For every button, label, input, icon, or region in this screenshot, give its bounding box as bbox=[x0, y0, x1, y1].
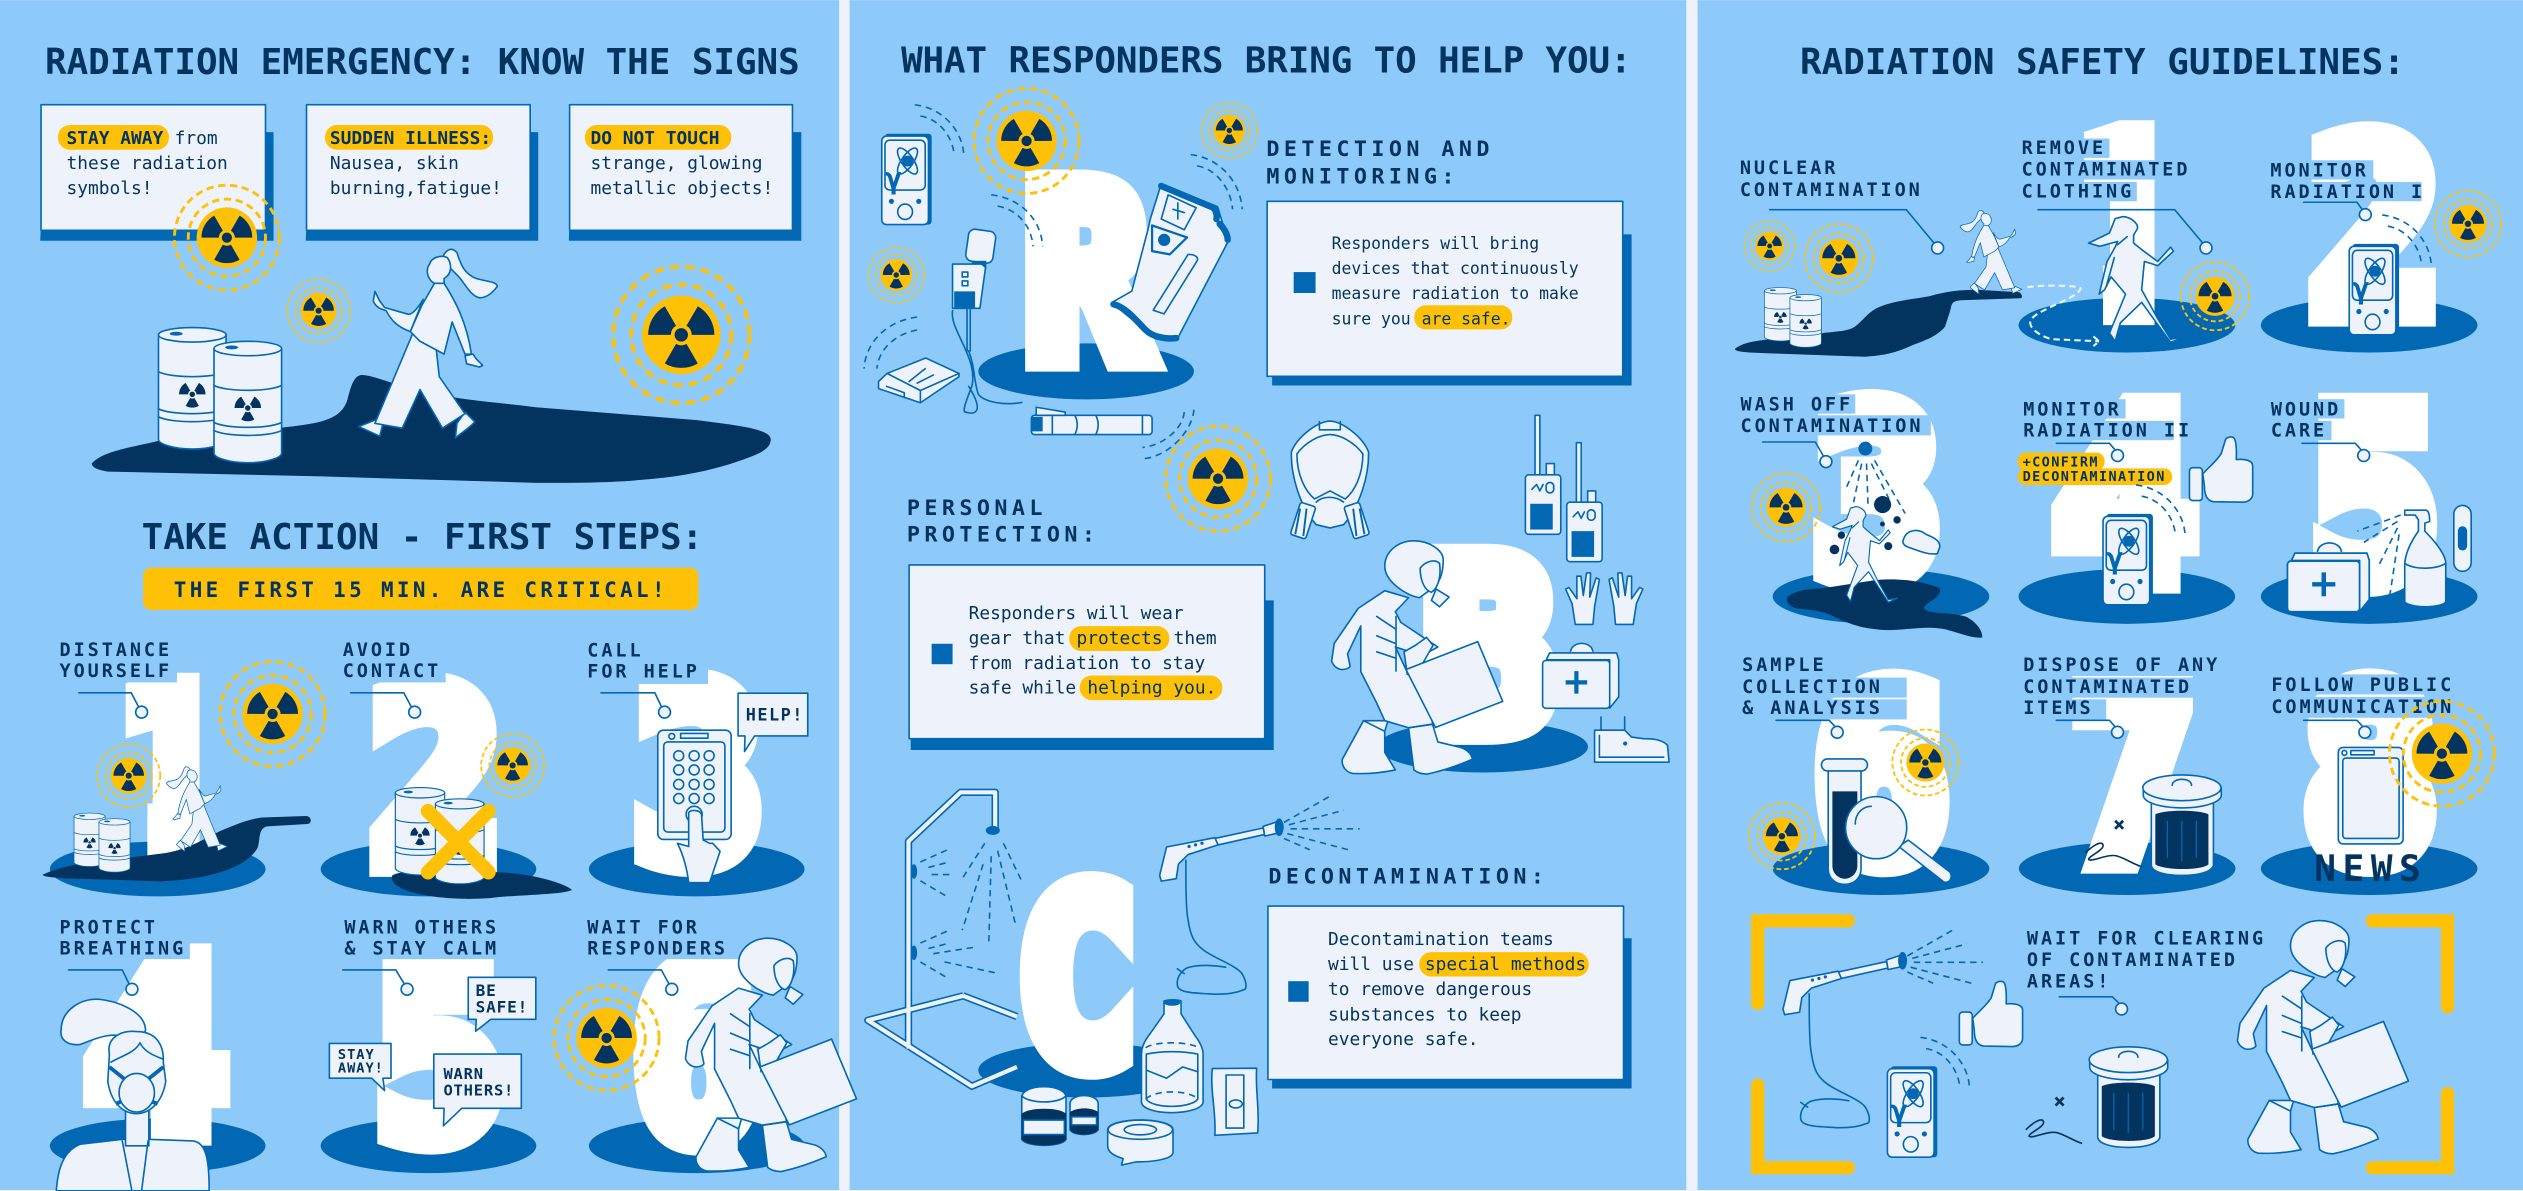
sign card: stay away: STAY AWAY bbox=[66, 128, 163, 149]
text card: personal protection: Responders will wear bbox=[969, 603, 1184, 624]
step 2: avoid contact: AVOID bbox=[343, 640, 413, 661]
sign card: stay away bbox=[40, 105, 274, 241]
text card: personal protection: helping you. bbox=[1087, 678, 1216, 699]
guideline 7: dispose of contaminated items: CONTAMINATED bbox=[2023, 677, 2192, 698]
guideline 1: remove contaminated clothing: CLOTHING bbox=[2022, 181, 2134, 202]
guideline 8: follow public communication bbox=[2261, 640, 2494, 916]
panel: take action, first steps bbox=[43, 517, 857, 1191]
text card: detection bbox=[1267, 201, 1632, 386]
guideline 3: wash off contamination: WASH OFF bbox=[1741, 394, 1853, 415]
section A illustration: detection and monitoring: R bbox=[1024, 136, 1149, 414]
guideline 7: dispose of contaminated items: 7 bbox=[2071, 639, 2196, 916]
section C illustration: decontamination: C bbox=[1017, 841, 1136, 1119]
heading: decontamination: DECONTAMINATION: bbox=[1268, 865, 1548, 890]
guideline 1: remove contaminated clothing: CONTAMINATED bbox=[2022, 160, 2190, 181]
step 5: warn others and stay calm: SAFE! bbox=[476, 998, 528, 1017]
sign card: do not touch: metallic objects! bbox=[591, 178, 773, 199]
guideline 6: sample collection and analysis: SAMPLE bbox=[1742, 655, 1827, 676]
guideline 7: dispose of contaminated items bbox=[2019, 639, 2235, 916]
sign card: do not touch: DO NOT TOUCH bbox=[591, 128, 720, 149]
guideline: nuclear contamination: NUCLEAR bbox=[1740, 158, 1838, 179]
heading: detection and monitoring bbox=[1266, 137, 1494, 190]
heading: personal protection bbox=[907, 496, 1099, 548]
guideline 6: sample collection and analysis: 6 bbox=[1814, 640, 1948, 916]
guideline 6: sample collection and analysis: COLLECTION bbox=[1742, 677, 1883, 698]
guideline 3: wash off contamination bbox=[1738, 360, 1989, 638]
step 1: distance yourself: DISTANCE bbox=[60, 640, 172, 661]
icon: small radiation hazard bbox=[287, 279, 350, 342]
title: what responders bring: WHAT RESPONDERS BRING TO HELP YOU: bbox=[901, 41, 1632, 82]
step 5: warn others and stay calm: STAY bbox=[338, 1047, 375, 1063]
text card: personal protection: gear that bbox=[969, 628, 1065, 649]
sign card: sudden illness bbox=[306, 105, 538, 241]
guideline 6: sample collection and analysis: & ANALYSIS bbox=[1742, 698, 1883, 719]
text card: personal protection: them bbox=[1174, 628, 1217, 649]
step 6: wait for responders: RESPONDERS bbox=[587, 938, 728, 959]
sign card: do not touch bbox=[569, 105, 801, 241]
step 5: warn others and stay calm: WARN bbox=[443, 1065, 484, 1083]
guideline 5: wound care: CARE bbox=[2271, 421, 2327, 442]
guideline 7: dispose of contaminated items: DISPOSE OF ANY bbox=[2023, 655, 2220, 676]
guideline 4: monitor radiation II: DECONTAMINATION bbox=[2023, 469, 2166, 485]
text card: decontamination: substances to keep bbox=[1328, 1004, 1522, 1025]
step 5: warn others and stay calm: WARN OTHERS bbox=[344, 917, 499, 938]
text card: detection: devices that continuously bbox=[1332, 259, 1579, 278]
step 1: distance yourself: YOURSELF bbox=[60, 661, 172, 682]
guideline 3: wash off contamination: 3 bbox=[1813, 360, 1941, 632]
step 1: distance yourself bbox=[43, 640, 325, 896]
guideline 8: follow public communication: 8 bbox=[2303, 640, 2437, 916]
guideline 1: remove contaminated clothing bbox=[2018, 120, 2250, 352]
guideline 2: monitor radiation I: MONITOR bbox=[2270, 161, 2369, 182]
text card: decontamination bbox=[1268, 906, 1632, 1089]
banner: first 15 minutes bbox=[143, 568, 698, 610]
step 3: call for help bbox=[582, 640, 808, 916]
step 5: warn others and stay calm: OTHERS! bbox=[443, 1081, 514, 1099]
text card: detection: measure radiation to make bbox=[1332, 284, 1579, 303]
sign card: stay away: from bbox=[175, 128, 218, 149]
text card: detection: sure you bbox=[1332, 309, 1411, 328]
guideline: nuclear contamination bbox=[1735, 158, 2022, 357]
guideline 8: follow public communication: NEWS bbox=[2314, 847, 2427, 890]
guideline 4: monitor radiation II bbox=[2018, 359, 2253, 635]
sign card: stay away: these radiation bbox=[66, 153, 228, 174]
panel: what responders bring bbox=[864, 41, 1669, 1165]
guideline 2: monitor radiation I: RADIATION I bbox=[2270, 182, 2425, 203]
text card: personal protection: protects bbox=[1076, 628, 1162, 649]
guideline: nuclear contamination: CONTAMINATION bbox=[1740, 180, 1923, 201]
guideline 3: wash off contamination: CONTAMINATION bbox=[1741, 416, 1923, 437]
text card: detection: are safe. bbox=[1422, 309, 1511, 328]
guideline 1: remove contaminated clothing: 1 bbox=[2076, 87, 2181, 368]
step 5: warn others and stay calm: 5 bbox=[375, 929, 505, 1191]
section A illustration: detection and monitoring bbox=[864, 88, 1257, 459]
heading: take action: TAKE ACTION - FIRST STEPS: bbox=[142, 517, 703, 558]
step 5: warn others and stay calm: & STAY CALM bbox=[344, 938, 499, 959]
guideline 5: wound care bbox=[2261, 361, 2477, 636]
step 3: call for help: HELP! bbox=[746, 705, 804, 725]
guideline 2: monitor radiation I bbox=[2261, 92, 2501, 369]
text card: decontamination: will use bbox=[1328, 954, 1414, 975]
text card: personal protection: safe while bbox=[969, 678, 1076, 699]
banner: first 15 minutes: THE FIRST 15 MIN. ARE CRITICAL! bbox=[174, 578, 665, 602]
icon: large radiation hazard bbox=[613, 267, 749, 403]
step 6: wait for responders: WAIT FOR bbox=[587, 917, 700, 938]
sign card: sudden illness: Nausea, skin bbox=[330, 153, 459, 174]
guideline 1: remove contaminated clothing: REMOVE bbox=[2022, 138, 2106, 159]
step 2: avoid contact: CONTACT bbox=[343, 661, 441, 682]
step 3: call for help: FOR HELP bbox=[587, 662, 700, 683]
sign card: sudden illness: SUDDEN ILLNESS: bbox=[330, 128, 491, 149]
heading: personal protection: PROTECTION: bbox=[907, 523, 1099, 548]
text card: decontamination: everyone safe. bbox=[1328, 1029, 1479, 1050]
guideline 8: follow public communication: COMMUNICATION bbox=[2271, 697, 2454, 718]
guideline 4: monitor radiation II: +CONFIRM bbox=[2023, 454, 2099, 470]
walking woman bbox=[359, 249, 497, 438]
step 5: warn others and stay calm: BE bbox=[476, 981, 497, 1000]
step 5: warn others and stay calm bbox=[321, 917, 536, 1191]
section B illustration: personal protection bbox=[1166, 415, 1669, 787]
step 6: wait for responders: 6 bbox=[632, 917, 759, 1191]
step 4: protect breathing bbox=[50, 910, 265, 1191]
title: radiation emergency: RADIATION EMERGENCY: KNOW THE SIGNS bbox=[45, 42, 800, 83]
guideline 8: follow public communication: FOLLOW PUBLIC bbox=[2271, 675, 2454, 696]
text card: decontamination: special methods bbox=[1425, 954, 1586, 975]
step 3: call for help: 3 bbox=[634, 640, 763, 916]
step 2: avoid contact: 2 bbox=[370, 642, 502, 919]
step 3: call for help: CALL bbox=[587, 641, 644, 662]
closing frame: wait for clearing of contaminated areas: WAIT FOR CLEARING bbox=[2027, 929, 2266, 950]
heading: detection and monitoring: DETECTION AND bbox=[1266, 137, 1494, 162]
panel: radiation safety guidelines bbox=[1735, 42, 2501, 1168]
barrels bbox=[158, 328, 282, 463]
closing frame: wait for clearing of contaminated areas: AREAS! bbox=[2027, 971, 2111, 992]
sign card: do not touch: strange, glowing bbox=[591, 153, 763, 174]
text card: decontamination: to remove dangerous bbox=[1328, 979, 1532, 1000]
sign card: sudden illness: burning,fatigue! bbox=[330, 178, 502, 199]
heading: detection and monitoring: MONITORING: bbox=[1266, 165, 1459, 190]
title: radiation safety guidelines: RADIATION SAFETY GUIDELINES: bbox=[1800, 42, 2405, 83]
section C illustration: decontamination bbox=[868, 792, 1360, 1165]
closing frame: wait for clearing of contaminated areas: OF CONTAMINATED bbox=[2027, 950, 2238, 971]
guideline 7: dispose of contaminated items: ITEMS bbox=[2023, 698, 2094, 719]
step 4: protect breathing: BREATHING bbox=[60, 938, 186, 959]
step 5: warn others and stay calm: AWAY! bbox=[338, 1061, 384, 1077]
step 2: avoid contact bbox=[321, 640, 572, 919]
text card: personal protection bbox=[909, 565, 1274, 750]
step 4: protect breathing: 4 bbox=[85, 910, 227, 1188]
guideline 4: monitor radiation II: 4 bbox=[2054, 359, 2196, 635]
section B illustration: personal protection: B bbox=[1423, 511, 1554, 787]
icon: radiation hazard bbox=[174, 185, 279, 290]
step 6: wait for responders bbox=[554, 917, 857, 1191]
guideline 4: monitor radiation II: MONITOR bbox=[2023, 399, 2122, 420]
contaminated puddle bbox=[92, 375, 771, 483]
text card: detection: Responders will bring bbox=[1332, 234, 1539, 253]
guideline 5: wound care: WOUND bbox=[2271, 399, 2341, 420]
step 4: protect breathing: PROTECT bbox=[60, 917, 158, 938]
text card: personal protection: from radiation to stay bbox=[969, 653, 1205, 674]
panel: radiation emergency, know the signs bbox=[40, 42, 801, 483]
guideline 2: monitor radiation I: 2 bbox=[2309, 92, 2441, 369]
guideline 5: wound care: 5 bbox=[2311, 361, 2439, 636]
step 1: distance yourself: 1 bbox=[118, 644, 226, 896]
closing frame: wait for clearing of contaminated areas bbox=[1758, 921, 2448, 1168]
guideline 6: sample collection and analysis bbox=[1739, 640, 1989, 916]
guideline 4: monitor radiation II: RADIATION II bbox=[2023, 421, 2192, 442]
text card: decontamination: Decontamination teams bbox=[1328, 929, 1554, 950]
sign card: stay away: symbols! bbox=[66, 178, 152, 199]
heading: personal protection: PERSONAL bbox=[907, 496, 1047, 521]
